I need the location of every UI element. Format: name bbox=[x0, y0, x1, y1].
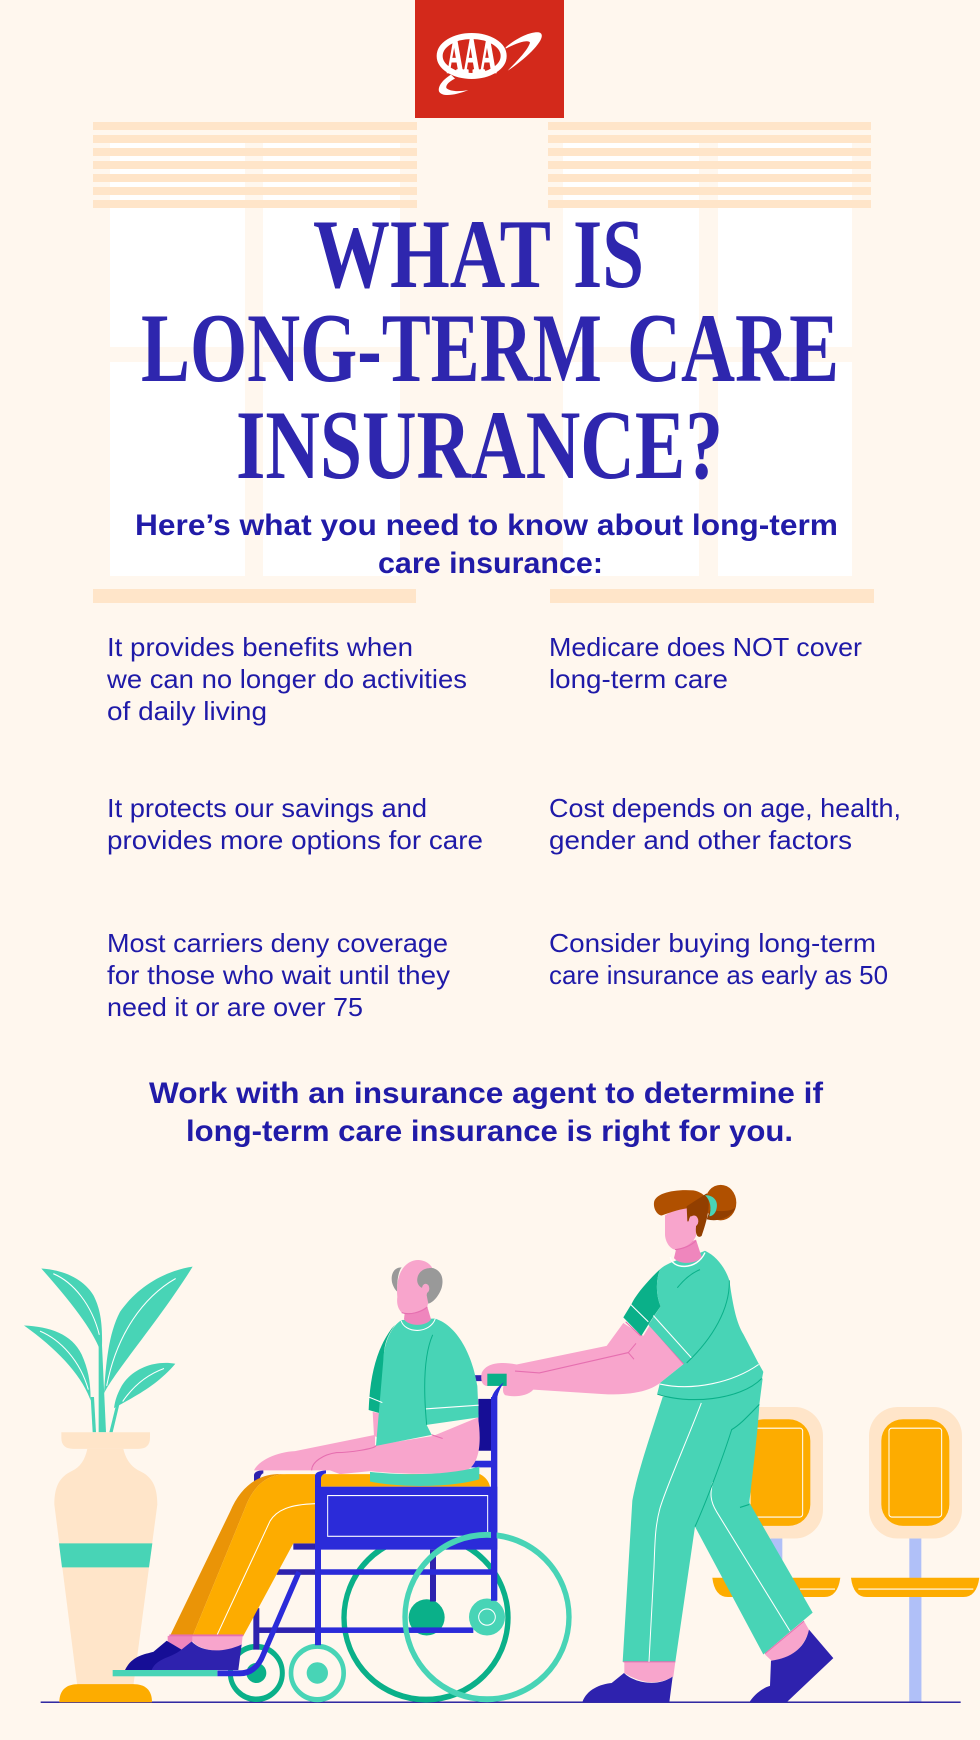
fact: benefits: of daily living bbox=[107, 696, 267, 726]
floor line bbox=[41, 1701, 961, 1703]
fact: benefits: we can no longer do activities bbox=[106, 664, 467, 694]
title bbox=[141, 200, 839, 500]
title: INSURANCE? bbox=[236, 391, 723, 500]
fact: cost bbox=[549, 793, 901, 855]
subheading: Here’s what you need to know about long-term bbox=[135, 509, 838, 542]
title: WHAT bbox=[313, 200, 551, 309]
fact: cost: gender and other factors bbox=[549, 825, 852, 855]
fact: Medicare bbox=[549, 632, 862, 694]
fact: carriers: need it or are over 75 bbox=[107, 992, 363, 1022]
illustration scene bbox=[24, 1185, 979, 1703]
fact: savings: It protects our savings and bbox=[107, 793, 427, 823]
patient bbox=[125, 1260, 490, 1670]
fact: savings bbox=[107, 793, 483, 855]
subheading: care insurance: bbox=[378, 547, 603, 580]
fact: buying age bbox=[549, 928, 888, 990]
fact: carriers bbox=[107, 928, 450, 1022]
fact: carriers: Most carriers deny coverage bbox=[107, 928, 448, 958]
waiting room chairs bbox=[712, 1407, 979, 1701]
fact: buying age: care insurance as early as 50 bbox=[549, 960, 888, 990]
call to action: long-term care insurance is right for you. bbox=[186, 1115, 793, 1148]
wheelchair front parts bbox=[113, 1470, 569, 1699]
call to action: Work with an insurance agent to determine if bbox=[149, 1077, 824, 1110]
title: IS bbox=[573, 200, 644, 309]
fact: Medicare: long-term care bbox=[549, 664, 728, 694]
window backdrop bbox=[93, 122, 874, 603]
fact: benefits bbox=[106, 632, 467, 726]
fact: buying age: Consider buying long-term bbox=[549, 928, 876, 958]
fact: Medicare: Medicare does NOT cover bbox=[549, 632, 862, 662]
plant in vase bbox=[24, 1267, 193, 1702]
fact: savings: provides more options for care bbox=[107, 825, 483, 855]
nurse bbox=[481, 1185, 833, 1702]
title: LONG-TERM bbox=[141, 294, 602, 403]
fact: cost: Cost depends on age, health, bbox=[549, 793, 901, 823]
title: CARE bbox=[627, 294, 839, 403]
fact: benefits: It provides benefits when bbox=[107, 632, 413, 662]
AAA logo bbox=[415, 0, 564, 118]
fact: carriers: for those who wait until they bbox=[107, 960, 450, 990]
subheading bbox=[135, 509, 838, 580]
call to action bbox=[149, 1077, 824, 1148]
AAA logo: AAA bbox=[447, 30, 496, 83]
wheelchair rear parts bbox=[230, 1375, 508, 1700]
